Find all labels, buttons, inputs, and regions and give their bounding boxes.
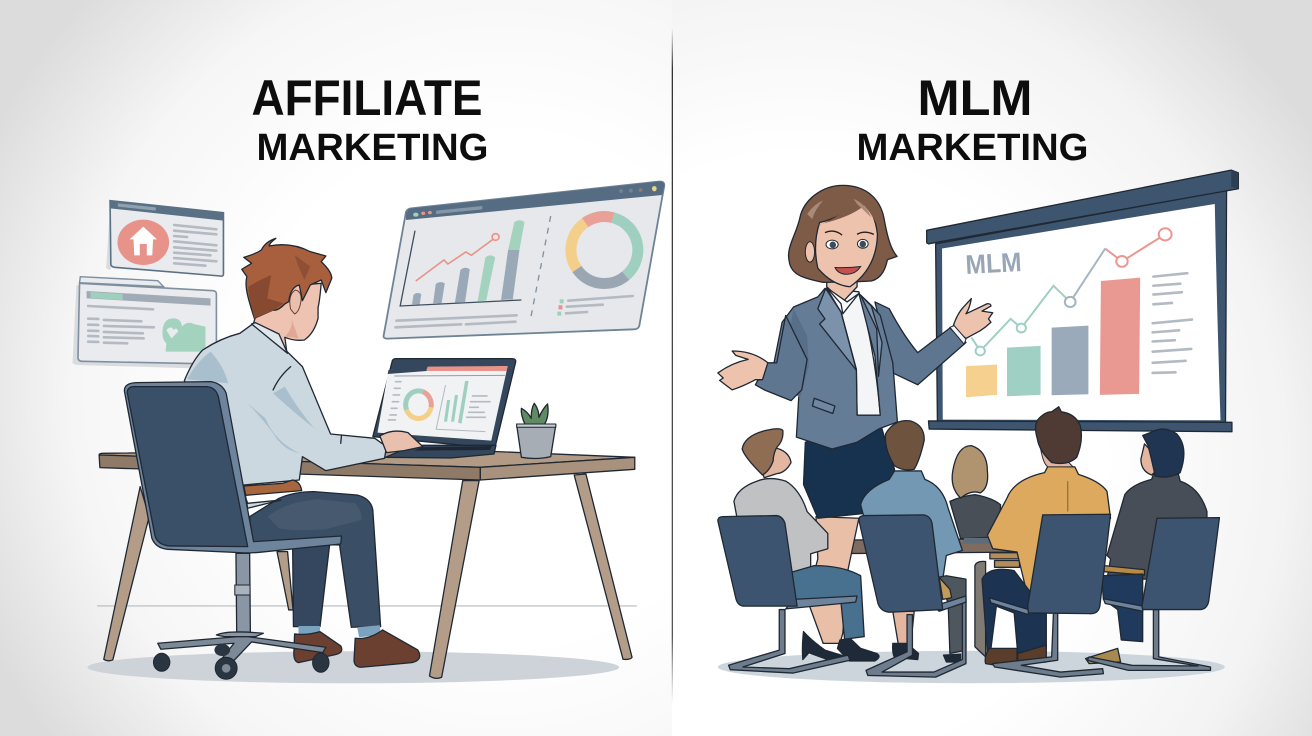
icon: house in red circle	[117, 220, 169, 265]
chair 1	[718, 516, 857, 673]
floor shadow	[718, 651, 1225, 683]
row of chairs	[718, 514, 1219, 677]
centre divider	[672, 28, 673, 704]
bar chart with trend line	[400, 220, 525, 306]
laptop	[373, 359, 516, 458]
on-screen MLM label: MLM	[965, 247, 1022, 280]
blazer	[773, 288, 897, 449]
hand on laptop	[380, 431, 423, 453]
chair 3	[989, 514, 1111, 677]
legend lines on screen	[1153, 273, 1192, 373]
attendee: grey shirt	[734, 429, 864, 639]
skirt	[804, 417, 895, 518]
floating panel: analytics dashboard	[384, 182, 664, 339]
collar	[827, 288, 859, 314]
man: seated, working on laptop	[184, 238, 423, 667]
chair 2	[859, 515, 966, 677]
title: affiliate marketing: MARKETING	[256, 127, 488, 169]
floor line	[97, 605, 637, 607]
title: MLM marketing: MLM	[918, 70, 1032, 126]
shirt	[184, 323, 386, 508]
desk back legs	[277, 552, 293, 610]
laptop donut	[406, 391, 431, 418]
collar	[252, 323, 288, 353]
chair 4	[1087, 518, 1219, 670]
floating panel: content page	[73, 277, 216, 368]
floating panel: home page	[106, 201, 224, 276]
neck and face	[254, 283, 321, 352]
desk	[99, 450, 635, 480]
legs and heels	[802, 517, 879, 661]
bar chart on screen	[966, 278, 1140, 397]
attendee: blue shirt	[861, 421, 966, 662]
presenter: woman in blazer	[718, 185, 993, 661]
icon: potted plant	[517, 403, 556, 458]
scene: affiliate marketer at a desk	[73, 182, 664, 683]
background: right half	[672, 0, 1312, 736]
title: affiliate marketing	[252, 70, 488, 169]
background: left half	[0, 0, 672, 736]
man's far arm on the desk	[279, 444, 310, 453]
hair	[242, 238, 332, 318]
trousers	[250, 492, 381, 627]
blouse	[827, 288, 880, 415]
donut chart	[571, 217, 638, 284]
desk front legs	[104, 481, 479, 678]
socks and shoes	[294, 625, 420, 667]
back-row attendee: woman	[950, 446, 1001, 539]
office chair	[124, 382, 342, 679]
neck	[827, 275, 857, 302]
near arm	[755, 315, 807, 401]
hair back	[789, 185, 897, 282]
raised hand	[953, 299, 993, 338]
title: MLM marketing: MARKETING	[856, 127, 1088, 169]
trend line on screen	[971, 228, 1172, 355]
far arm	[875, 302, 966, 385]
face	[816, 199, 877, 287]
open hand	[718, 351, 768, 390]
meeting table	[821, 538, 1021, 657]
title: affiliate marketing: AFFILIATE	[252, 70, 482, 126]
title: MLM marketing	[856, 70, 1088, 169]
attendee: dark shirt	[1086, 429, 1207, 664]
scene: MLM presentation	[718, 170, 1238, 683]
chair base and wheels	[153, 553, 329, 679]
projector screen	[927, 170, 1238, 432]
attendee: yellow jacket	[982, 407, 1111, 669]
floor shadow	[87, 651, 619, 683]
belt	[244, 480, 302, 495]
icon: green hands and heart	[162, 318, 205, 352]
